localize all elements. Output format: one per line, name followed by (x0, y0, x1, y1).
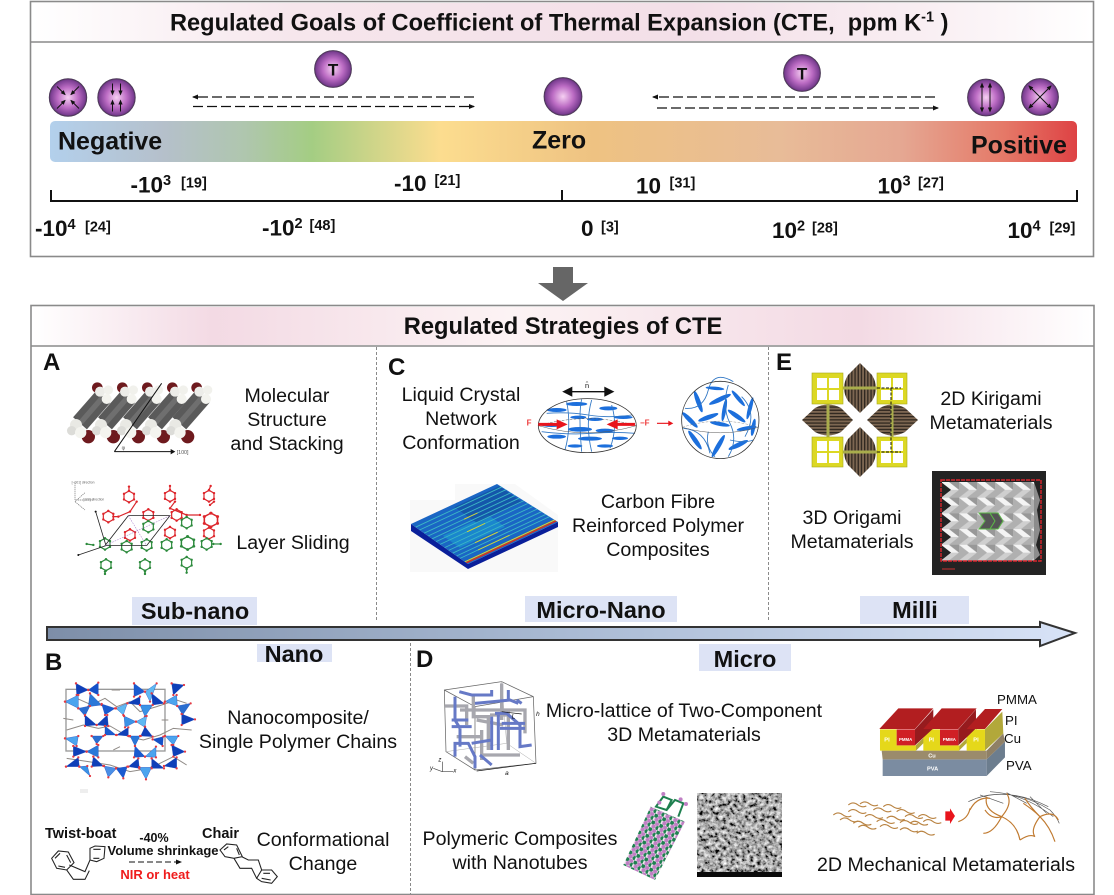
gradient bar: CTE scale: Negative (58, 128, 162, 156)
image: micro-lattice cube: a (505, 770, 509, 777)
panel: regulated goals of CTE (30, 2, 1094, 256)
axis labels: upper row: -10 (394, 171, 427, 196)
heading: goals title: Regulated Goals of Coefficient of Thermal Expansion (CTE, ppm K (170, 10, 921, 36)
labels: device layers: PI (1005, 713, 1018, 728)
panel A: sub-nano (43, 349, 350, 625)
axis labels: upper row: [27] (918, 176, 944, 192)
scale tag: sub-nano: Sub-nano (141, 598, 249, 624)
axis labels: lower row: [24] (85, 220, 111, 236)
arrows: negative side dashed (193, 97, 474, 106)
image: micro-lattice cube: x (452, 769, 457, 775)
image: molecular stacking (67, 382, 212, 456)
image: kirigami structure (802, 363, 918, 477)
panel B: nano: B (45, 649, 62, 676)
image: layered device (879, 708, 1005, 776)
decorative speck from source image (80, 789, 88, 793)
heading: goals title: ) (934, 10, 948, 36)
panel: regulated strategies of CTE (31, 306, 1094, 894)
axis: CTE ticks (51, 190, 1077, 201)
icon: temperature ball right: T (797, 64, 808, 84)
label: conformational change: Change (289, 853, 357, 875)
labels: device layers (997, 692, 1037, 773)
label: micro-lattice: 3D Metamaterials (607, 724, 761, 746)
scale tag: micro (699, 644, 791, 672)
panel D: micro (416, 644, 1075, 880)
panel B: nano (45, 641, 397, 883)
arrows: positive side dashed (653, 97, 938, 108)
label: 2D kirigami: 2D Kirigami (940, 388, 1042, 410)
icon: temperature ball left (314, 50, 352, 88)
axis labels: upper row: -10 (130, 173, 163, 198)
chemistry: twist-boat to chair: Volume shrinkage (107, 843, 219, 858)
icon: temperature ball right (784, 54, 820, 92)
axis labels: lower row: 0 (581, 216, 594, 241)
axis labels: lower row: 10 (772, 218, 797, 243)
label: liquid crystal network: Liquid Crystal (402, 384, 520, 406)
axis labels: lower row: [3] (601, 220, 619, 236)
icon: isotropic contraction ball (49, 79, 87, 116)
image: micro-lattice cube: h (536, 711, 540, 718)
axis labels: upper row: 3 (903, 174, 911, 190)
label: layer sliding: Layer Sliding (236, 532, 350, 554)
labels: device layers: Cu (1004, 731, 1021, 746)
image: layered device: PMMA (899, 737, 913, 742)
image: micro-lattice cube: y (429, 766, 434, 772)
image: layered device: PI (884, 737, 890, 743)
label: polymeric composites: Polymeric Composites (423, 828, 618, 850)
axis labels: lower row: 2 (797, 218, 805, 234)
image: layered device: PVA (927, 766, 938, 772)
label: liquid crystal network: Conformation (402, 432, 520, 454)
axis labels: upper row: 10 (878, 173, 903, 198)
label: 3D origami: Metamaterials (790, 531, 914, 553)
image: layer sliding lattice: [−001] direction (72, 481, 95, 485)
axis labels: lower row: -10 (35, 216, 68, 241)
label: molecular structure: and Stacking (230, 433, 344, 455)
axis labels: lower row: -10 (262, 216, 295, 240)
axis labels: lower row: [48] (310, 218, 335, 234)
image: nanotube (623, 792, 688, 880)
image: molecular stacking: [100] (177, 450, 189, 456)
axis labels: lower row: 2 (295, 216, 303, 232)
image: relaxed LCN sphere (681, 377, 759, 459)
axis labels: lower row: 10 (1008, 218, 1033, 243)
scale tag: milli (860, 596, 969, 624)
image: 2D to 3D mesostructure (833, 792, 1059, 842)
image: layered device: PI (929, 737, 934, 743)
label: liquid crystal network: Network (425, 408, 497, 430)
image: layered device: Cu (928, 753, 936, 759)
label: 3D origami: 3D Origami (802, 507, 902, 529)
image: SEM micrograph (697, 793, 782, 877)
icon: uniaxial expansion ball (968, 79, 1004, 116)
image: stretched LCN ellipsoid: F (527, 418, 532, 427)
image: micro-lattice cube: L (512, 713, 516, 720)
axis labels: upper row: [31] (670, 176, 695, 192)
image: layer sliding lattice (72, 481, 221, 574)
panel D: micro: D (416, 646, 433, 673)
axis labels: upper row: [19] (181, 176, 207, 192)
label: 2D mechanical metamaterials: 2D Mechanical Metamaterials (817, 854, 1075, 876)
panel E: milli (776, 349, 1053, 624)
image: nanocomposite framework (63, 683, 195, 779)
gradient bar: CTE scale: Positive (971, 132, 1067, 160)
chemistry: twist-boat to chair (45, 826, 277, 883)
icon: temperature ball left: T (328, 60, 339, 80)
gradient bar: CTE scale (50, 121, 1077, 162)
chemistry: twist-boat to chair: -40% (139, 831, 169, 845)
chemistry: twist-boat to chair: Twist-boat (45, 826, 117, 842)
scale tag: nano: Nano (265, 641, 323, 667)
image: layer sliding lattice: [100] direction (83, 498, 104, 502)
icon: isotropic expansion ball (1022, 78, 1058, 116)
label: carbon fibre composites: Composites (606, 539, 710, 561)
image: layered device: PMMA (943, 737, 957, 742)
image: micro-lattice cube (429, 682, 540, 777)
labels: device layers: PVA (1006, 758, 1032, 773)
scale tag: milli: Milli (892, 597, 938, 623)
image: molecular stacking: φ (122, 445, 126, 451)
labels: device layers: PMMA (997, 692, 1037, 707)
heading: goals title: -1 (921, 10, 934, 26)
axis labels: upper row: 3 (163, 173, 171, 189)
image: stretched LCN ellipsoid: −F (640, 418, 650, 427)
gradient bar: CTE scale: Zero (532, 126, 586, 154)
axis labels: lower row: 4 (1033, 218, 1041, 234)
image: micro-lattice cube: z (437, 758, 441, 764)
label: carbon fibre composites: Carbon Fibre (601, 491, 715, 513)
label: 2D kirigami: Metamaterials (929, 412, 1053, 434)
image: stretched LCN ellipsoid: n̂ (585, 381, 589, 390)
arrow: length scale (47, 622, 1075, 646)
label: molecular structure: Molecular (245, 385, 330, 407)
axis labels: upper row (130, 171, 944, 198)
icon: uniaxial contraction ball (98, 79, 135, 116)
label: molecular structure: Structure (247, 409, 327, 431)
label: polymeric composites: with Nanotubes (451, 852, 588, 874)
panel C: micro-nano (388, 354, 759, 623)
image: layered device: PI (973, 737, 979, 743)
panel A: sub-nano: A (43, 349, 60, 376)
axis labels: lower row (35, 216, 1075, 243)
scale tag: micro-nano: Micro-Nano (536, 597, 666, 623)
axis labels: lower row: [29] (1050, 220, 1075, 236)
label: nanocomposite: Single Polymer Chains (199, 731, 397, 753)
axis labels: upper row: [21] (434, 173, 460, 189)
icon: zero expansion ball (544, 78, 582, 116)
label: micro-lattice: Micro-lattice of Two-Component (546, 700, 823, 722)
label: carbon fibre composites: Reinforced Polymer (572, 515, 745, 537)
label: nanocomposite: Nanocomposite/ (227, 707, 369, 729)
image: stretched LCN ellipsoid (527, 381, 673, 453)
chemistry: twist-boat to chair: Chair (202, 826, 239, 842)
arrow: goals to strategies (538, 267, 588, 301)
scale tag: micro: Micro (714, 646, 776, 672)
axis labels: lower row: 4 (68, 217, 76, 233)
axis labels: upper row: 10 (636, 173, 661, 198)
chemistry: twist-boat to chair: NIR or heat (120, 867, 190, 882)
image: carbon fibre composite plate (410, 484, 558, 572)
panel E: milli: E (776, 349, 792, 376)
panel C: micro-nano: C (388, 354, 405, 381)
image: origami photo (932, 471, 1046, 575)
axis labels: lower row: [28] (812, 220, 838, 236)
heading: strategies title: Regulated Strategies of CTE (404, 314, 722, 340)
label: conformational change: Conformational (257, 829, 389, 851)
